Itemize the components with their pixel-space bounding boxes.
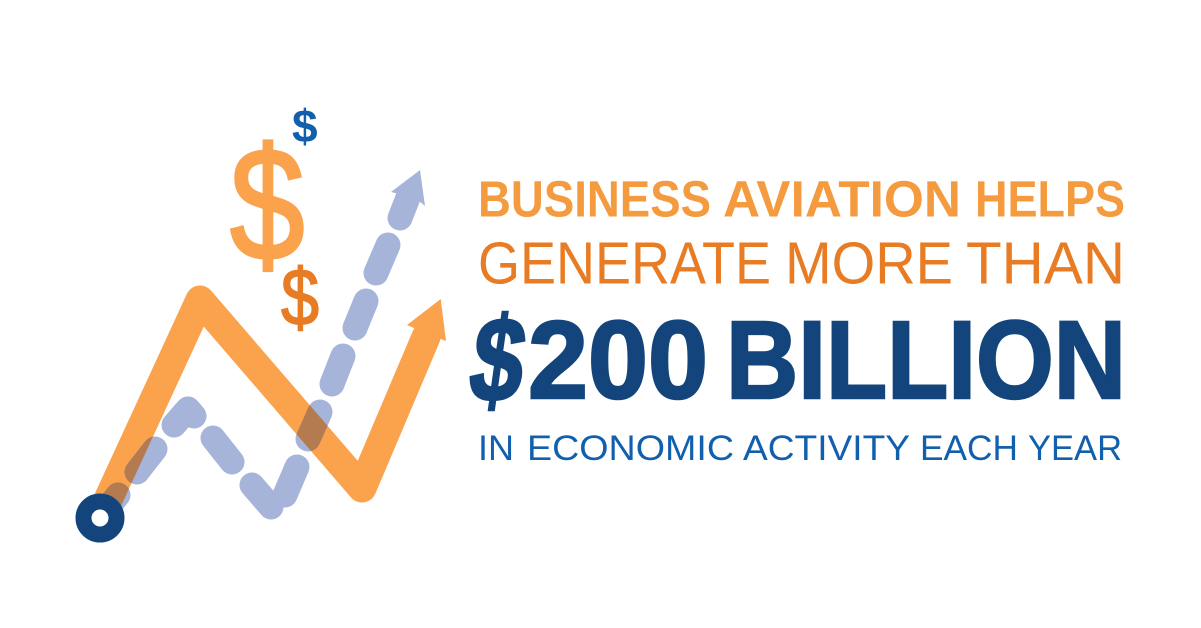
heading line: generate more than: MORE (785, 230, 953, 296)
icon: small dark orange dollar sign: $ (281, 252, 319, 342)
chart: rising trend lines (84, 170, 446, 534)
icon: large orange dollar sign: $ (230, 115, 305, 294)
heading line: business aviation helps: AVIATION (723, 171, 961, 228)
icon: small blue dollar sign: $ (292, 100, 318, 152)
subheading: in economic activity each year: IN (478, 428, 514, 468)
heading line: generate more than: THAN (966, 230, 1125, 296)
heading line: business aviation helps (478, 171, 1125, 228)
start point marker (84, 502, 116, 534)
subheading: in economic activity each year: ECONOMIC (527, 428, 734, 468)
heading line: business aviation helps: BUSINESS (478, 171, 711, 228)
key figure: $200 billion: BILLION (726, 299, 1126, 422)
subheading: in economic activity each year: EACH (920, 428, 1018, 468)
overlap of dashed line and orange line (100, 412, 320, 517)
solid orange trend arrow (100, 299, 446, 517)
dashed blue trend arrow (100, 170, 425, 517)
key figure: $200 billion: 200 (528, 299, 708, 422)
heading line: generate more than (478, 230, 1125, 296)
subheading: in economic activity each year (478, 428, 1122, 468)
subheading: in economic activity each year: YEAR (1028, 428, 1122, 468)
infographic canvas (76, 108, 1124, 542)
key figure: $200 billion: $ (462, 294, 534, 427)
heading line: generate more than: GENERATE (478, 230, 771, 296)
heading line: business aviation helps: HELPS (975, 171, 1125, 228)
subheading: in economic activity each year: ACTIVITY (743, 428, 910, 468)
key figure: $200 billion (462, 294, 1126, 427)
